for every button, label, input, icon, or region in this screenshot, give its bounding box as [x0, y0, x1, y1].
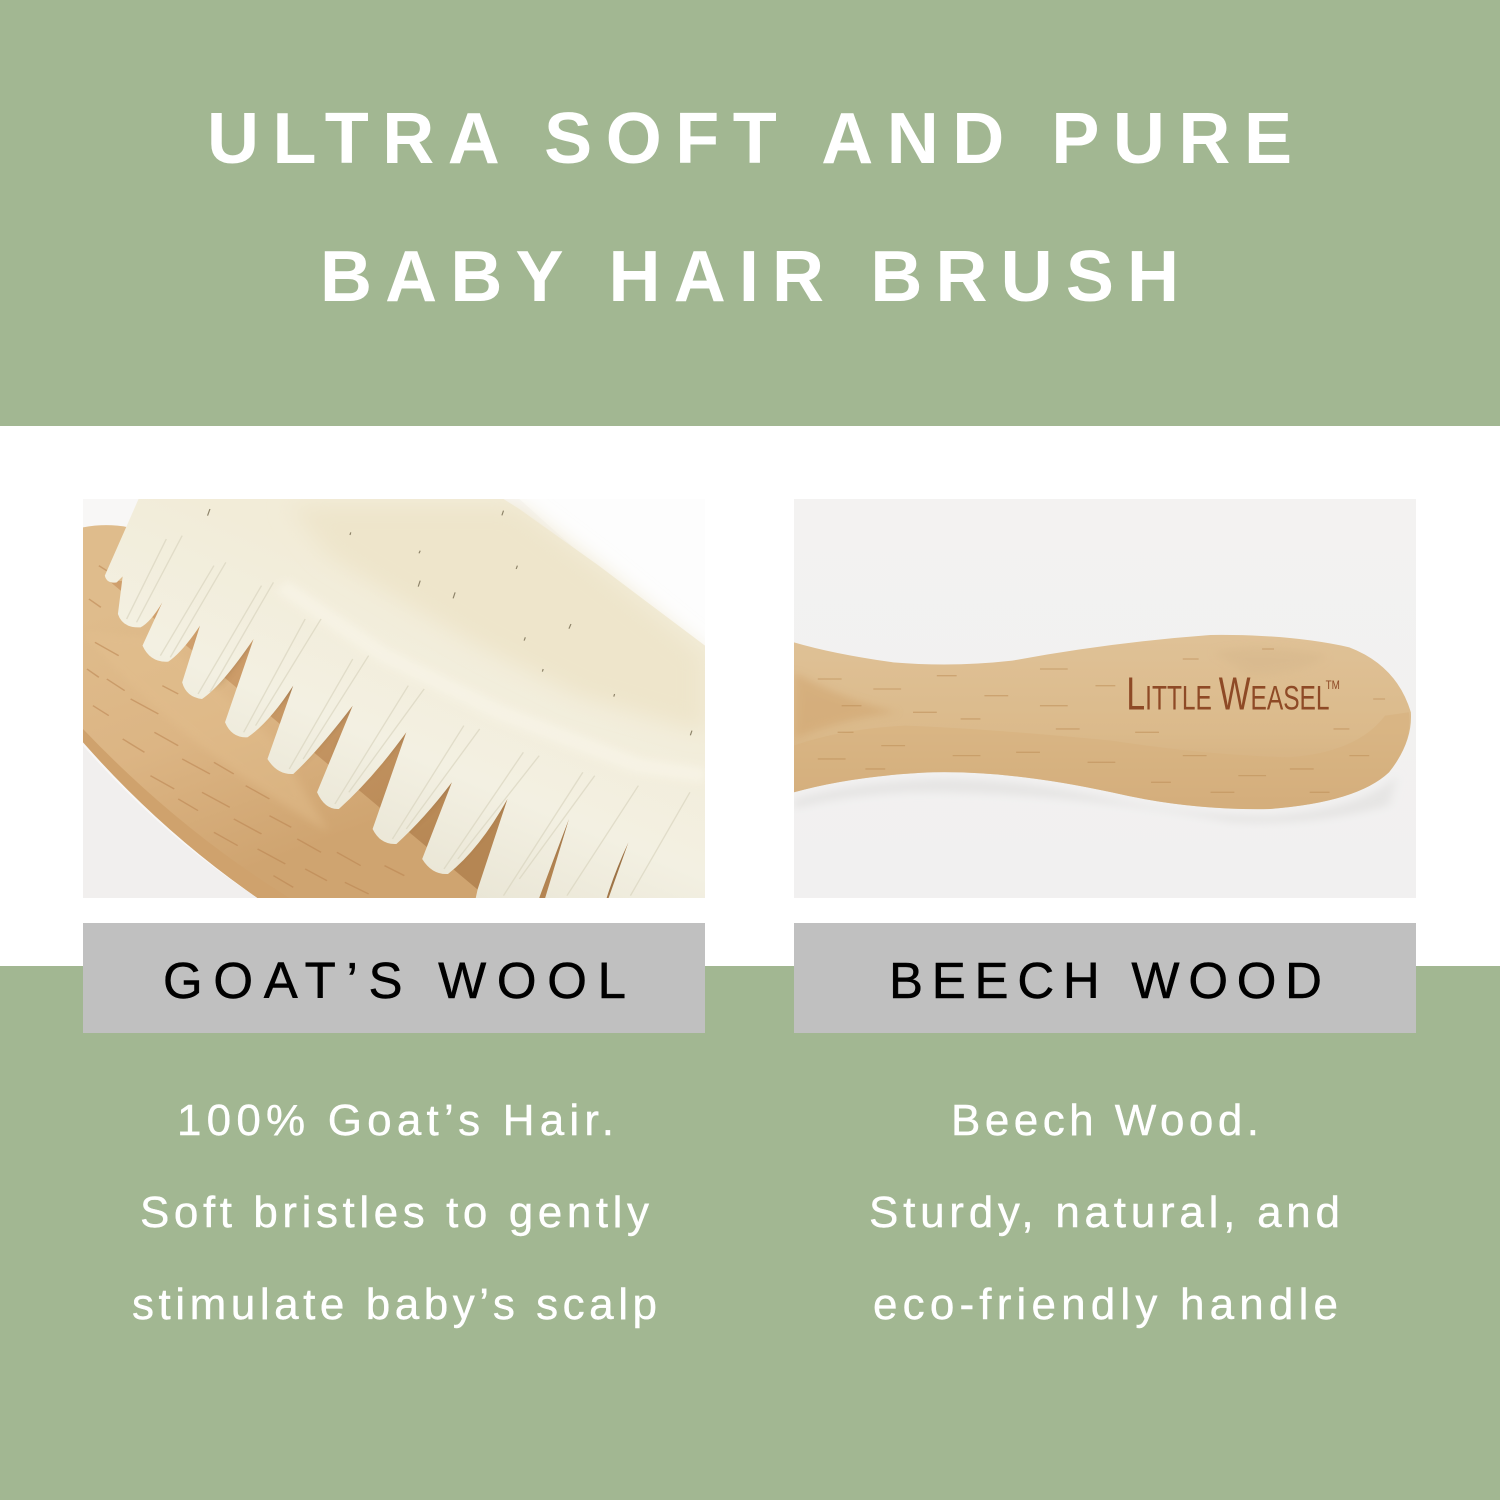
bristle mass with tufts [105, 499, 705, 898]
label bar: beech wood: BEECH WOOD [889, 952, 1322, 1009]
title: ULTRA SOFT AND PURE [207, 99, 1292, 179]
top green banner [0, 0, 1500, 426]
description: goat's wool: 100% Goat’s Hair. [177, 1096, 614, 1145]
cream top surface of bristles [289, 506, 705, 732]
wood grain [87, 566, 404, 894]
wood grain [818, 649, 1385, 792]
handle side bevel [794, 712, 1409, 809]
specks on top surface [208, 509, 692, 735]
handle shadow [798, 780, 1391, 820]
fine bristle strands [127, 536, 690, 896]
brand engraving: LITTLE WEASEL [1126, 668, 1330, 720]
description: beech wood: Sturdy, natural, and [869, 1188, 1340, 1237]
title [207, 99, 1292, 317]
photo: beech wood handle: TM [1326, 678, 1340, 692]
photo: beech wood handle [794, 499, 1416, 898]
label bar: goat's wool [83, 923, 705, 1033]
wooden handle [794, 635, 1411, 809]
description: goat's wool: stimulate baby’s scalp [132, 1280, 657, 1329]
description: beech wood: Beech Wood. [951, 1096, 1259, 1145]
title: BABY HAIR BRUSH [320, 237, 1179, 317]
shadowed gaps behind bristles [110, 580, 628, 898]
description: goat's wool [132, 1096, 657, 1329]
label bar: beech wood [794, 923, 1416, 1033]
description: beech wood: eco-friendly handle [873, 1280, 1338, 1329]
bottom green panel [0, 966, 1500, 1500]
label bar: goat's wool: GOAT’S WOOL [163, 952, 626, 1009]
bright ridge along bristles [281, 586, 705, 776]
photo: goat's wool bristles [83, 499, 705, 898]
brush wooden base [83, 525, 504, 898]
description: beech wood [869, 1096, 1340, 1329]
description: goat's wool: Soft bristles to gently [140, 1188, 649, 1237]
